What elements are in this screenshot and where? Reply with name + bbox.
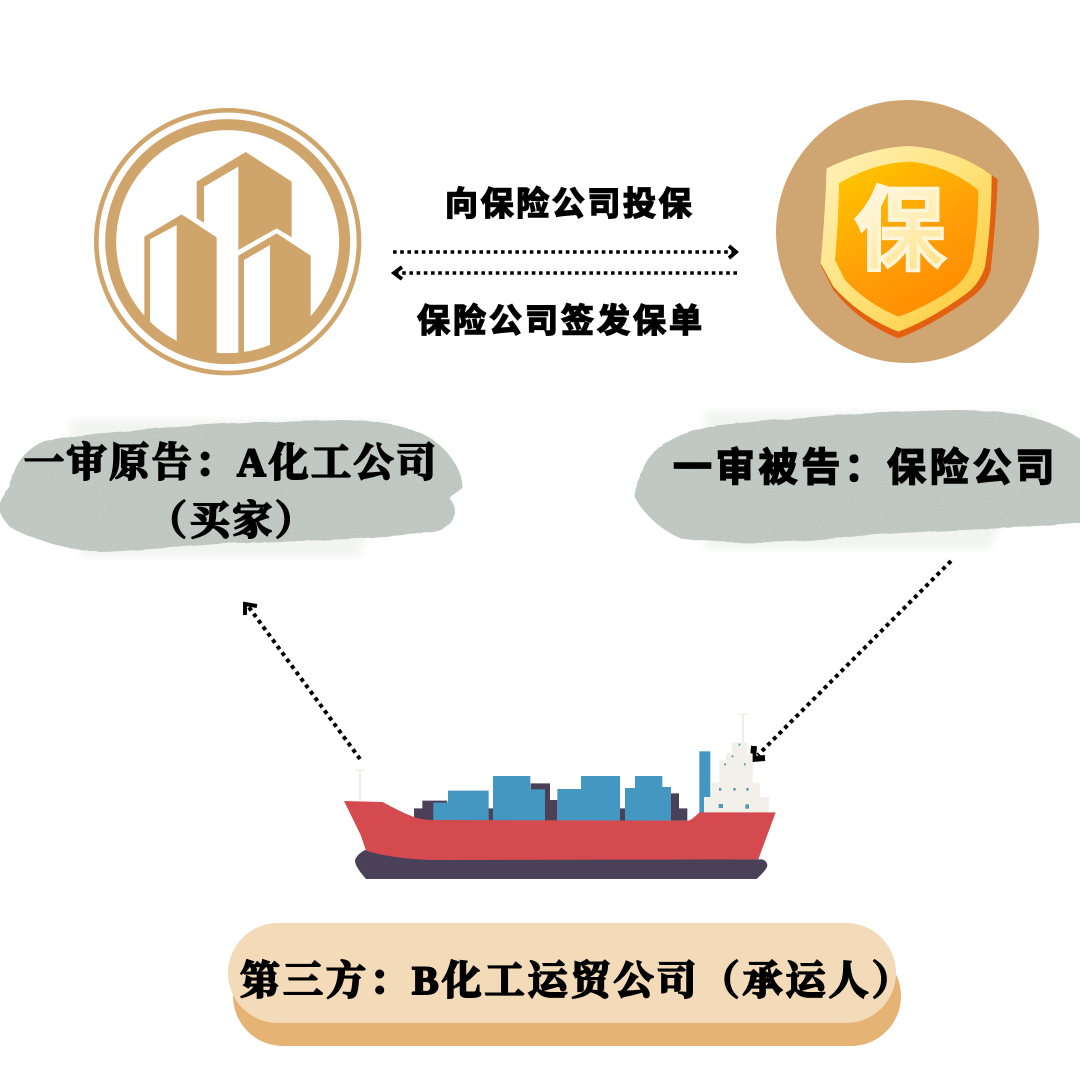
right building [238, 233, 311, 357]
pill face [228, 923, 896, 1023]
arrow: defendant to ship [753, 561, 951, 759]
pill label: 第三方：B化工运贸公司（承运人） [240, 958, 915, 1003]
arrow: to buyer [394, 267, 737, 279]
tall centre building [197, 152, 292, 250]
panel: third party pill [228, 923, 915, 1046]
shield face [835, 162, 978, 317]
badge circle [776, 100, 1039, 363]
panel: defendant [634, 410, 1080, 549]
masts [355, 713, 749, 801]
heading: 一审被告：保险公司 [673, 447, 1058, 490]
brush blob [634, 410, 1080, 542]
shield rim [821, 146, 992, 332]
shield character: 保 [854, 181, 946, 282]
red hull [344, 801, 776, 860]
arrow: ship to plaintiff [245, 604, 360, 759]
icon: building logo in double ring [96, 110, 359, 373]
outer ring [96, 110, 359, 373]
brush blob [0, 420, 462, 552]
dark containers [414, 783, 687, 821]
left building [144, 214, 217, 357]
icon: container ship [344, 713, 776, 879]
label: policy issued: 保险公司签发保单 [417, 302, 705, 339]
heading line 2: （买家） [147, 498, 317, 543]
inner ring [111, 125, 345, 359]
brush halo [705, 412, 1035, 549]
label: purchase insurance: 向保险公司投保 [445, 185, 694, 222]
blue containers [433, 751, 710, 821]
keel [355, 850, 767, 879]
icon: insurance shield badge [776, 100, 1039, 363]
windows [719, 744, 749, 809]
arrow: to insurer [393, 246, 736, 258]
heading line 1: 一审原告：A化工公司 [24, 440, 439, 485]
pill shadow [233, 946, 901, 1046]
brush halo [70, 420, 390, 556]
panel: plaintiff [0, 420, 462, 556]
superstructure [704, 742, 769, 813]
shield shadow edge [821, 147, 998, 338]
